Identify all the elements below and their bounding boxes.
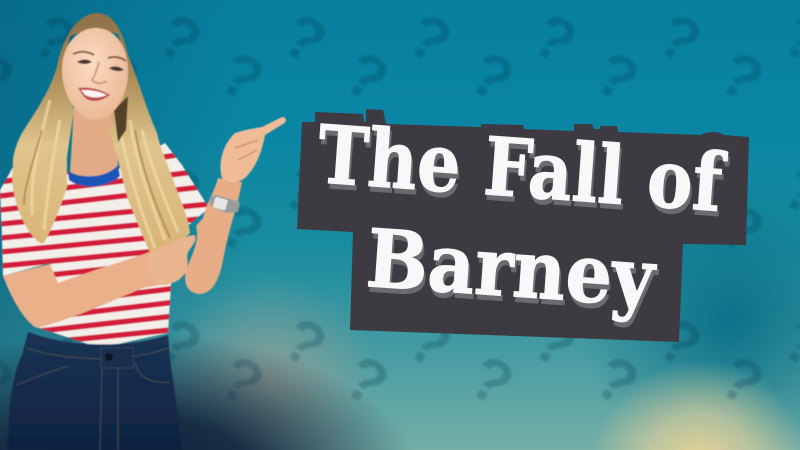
pointing hand <box>221 117 286 182</box>
woman pointing <box>0 13 286 450</box>
smile <box>78 88 110 101</box>
hair strands <box>32 100 178 248</box>
upper arm crossing <box>3 240 186 328</box>
jeans details <box>17 348 170 450</box>
hair shadow by neck <box>114 96 128 142</box>
title panel <box>297 109 749 342</box>
eyebrows <box>73 52 126 61</box>
title line 1: The Fall of <box>316 112 731 235</box>
title line 1: The Fall of <box>315 107 729 230</box>
raised arm <box>185 178 242 294</box>
watch <box>210 195 240 213</box>
title line 2: Barney <box>364 211 660 325</box>
nose <box>92 62 107 83</box>
face <box>62 28 128 120</box>
blue collar <box>68 165 120 186</box>
hair <box>12 13 190 253</box>
eyes <box>77 60 124 71</box>
gripping hand <box>148 235 196 285</box>
title line 2: Barney <box>365 216 661 330</box>
shirt <box>0 140 215 355</box>
neck and chest <box>70 105 118 185</box>
jeans <box>8 332 181 450</box>
